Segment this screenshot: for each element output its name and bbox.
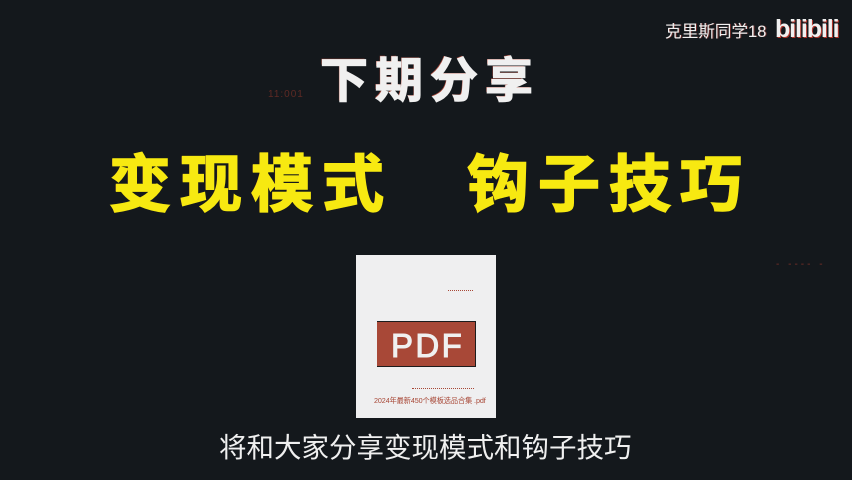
faint artifact: left of title: 11:001 bbox=[268, 89, 304, 100]
panel: pdf document bbox=[356, 255, 496, 418]
file name: 2024年最新450个模板选品合集 .pdf bbox=[374, 396, 486, 405]
faint artifact: right dashes: - ---- - bbox=[776, 259, 826, 270]
pdf label: PDF bbox=[391, 327, 464, 364]
subtitle: 将和大家分享变现模式和钩子技巧 bbox=[219, 432, 632, 463]
title: next issue: 下期分享 bbox=[320, 55, 540, 108]
heading: hook techniques: 钩子技巧 bbox=[467, 151, 751, 220]
pdf badge bbox=[377, 321, 476, 367]
dotted line bbox=[412, 388, 474, 389]
watermark: author name: 克里斯同学18 bbox=[665, 22, 766, 41]
watermark: bilibili logo: bilibili bbox=[775, 15, 838, 43]
dotted mark top bbox=[448, 290, 473, 291]
heading: monetization models: 变现模式 bbox=[109, 151, 393, 220]
